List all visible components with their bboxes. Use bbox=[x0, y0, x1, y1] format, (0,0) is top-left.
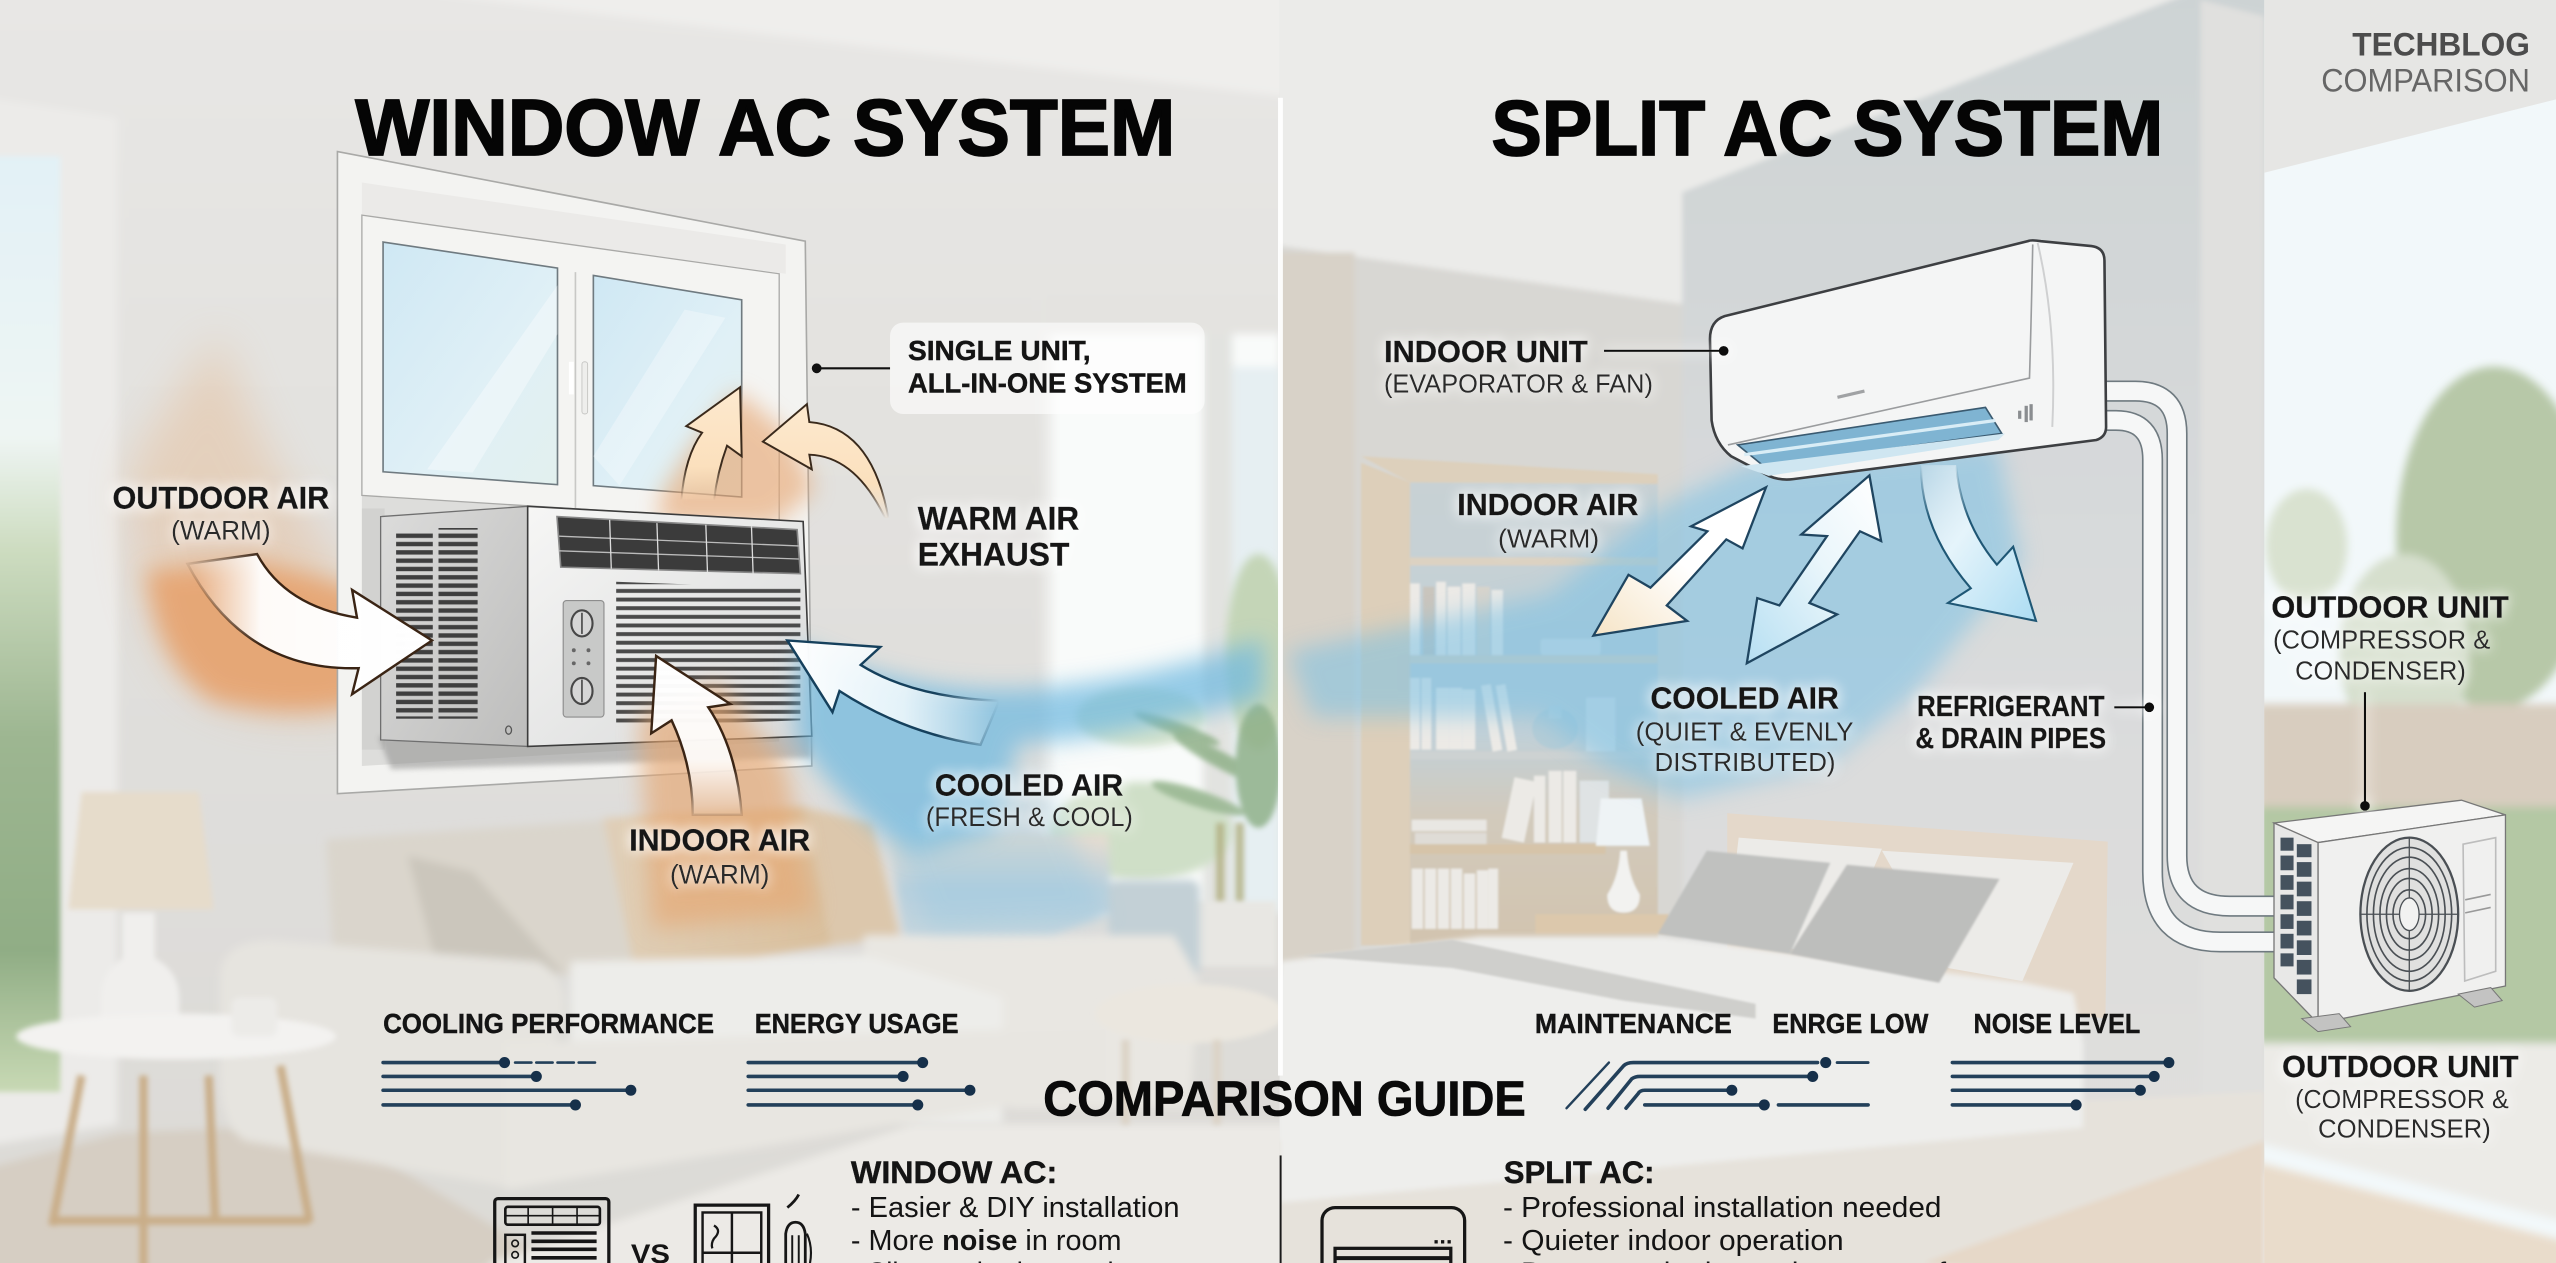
panel: split AC system bbox=[1271, 0, 2556, 1263]
divider: centre white line bbox=[1278, 98, 1283, 1076]
arrow: cooled air bbox=[787, 640, 999, 745]
icon: window AC unit bbox=[495, 1199, 609, 1263]
metric: energy usage bbox=[748, 1008, 975, 1110]
label: outdoor unit lower: OUTDOOR UNIT bbox=[2282, 1049, 2519, 1084]
metric: noise level bbox=[1952, 1008, 2174, 1110]
arrow: outdoor air bbox=[187, 554, 432, 694]
label: indoor air: INDOOR AIR bbox=[629, 823, 810, 858]
gray pillows bbox=[1658, 851, 1999, 983]
books bbox=[1410, 582, 1615, 929]
label: outdoor unit lower bbox=[2282, 1049, 2519, 1144]
fan bbox=[2360, 838, 2458, 991]
metric: maintenance: MAINTENANCE bbox=[1535, 1008, 1732, 1039]
label: indoor air: (WARM) bbox=[1498, 524, 1599, 554]
brand: techblog comparison: TECHBLOG bbox=[2352, 25, 2530, 62]
divider: bottom vertical line bbox=[1280, 1155, 1282, 1263]
label: indoor air: (WARM) bbox=[670, 859, 769, 889]
label: refrigerant and drain pipes: REFRIGERANT bbox=[1917, 691, 2105, 723]
icon: window with airflow bbox=[695, 1195, 811, 1263]
label: cooled air: COOLED AIR bbox=[935, 767, 1123, 802]
glow: split cooled air bbox=[1288, 443, 2021, 799]
glow: warm outdoor air core bbox=[147, 562, 399, 711]
outdoor scene bbox=[2250, 0, 2556, 1263]
label: cooled air: (FRESH & COOL) bbox=[926, 802, 1133, 832]
side louvers bbox=[396, 528, 478, 719]
list: window AC: WINDOW AC: bbox=[851, 1154, 1057, 1190]
label: outdoor air bbox=[112, 479, 329, 545]
list: split AC: - Professional installation needed bbox=[1503, 1192, 1941, 1224]
label: cooled air: DISTRIBUTED) bbox=[1655, 747, 1835, 777]
label: indoor air bbox=[629, 823, 810, 889]
background: bedroom bbox=[1271, 0, 2556, 1263]
arrow: warm exhaust side bbox=[763, 404, 888, 518]
label: cooled air bbox=[926, 767, 1133, 832]
glow: warm exhaust bbox=[660, 391, 815, 525]
label: cooled air bbox=[1636, 680, 1853, 777]
brand: techblog comparison: COMPARISON bbox=[2321, 61, 2530, 98]
labels: window AC airflows bbox=[112, 479, 1133, 889]
window panes bbox=[383, 242, 742, 497]
labels: split AC parts bbox=[1384, 334, 2519, 1144]
label: indoor unit: (EVAPORATOR & FAN) bbox=[1384, 369, 1653, 399]
label: indoor unit: INDOOR UNIT bbox=[1384, 334, 1588, 369]
label: warm air exhaust: EXHAUST bbox=[918, 536, 1069, 572]
panel: window AC system bbox=[0, 0, 1320, 1263]
air vent bbox=[1738, 407, 2002, 466]
arrow: indoor air bbox=[651, 656, 742, 815]
sofa bbox=[220, 807, 1200, 1190]
outdoor unit bbox=[2274, 800, 2505, 1032]
metric: energy usage: ENERGY USAGE bbox=[755, 1008, 958, 1039]
window bbox=[337, 152, 812, 794]
arrow: warm exhaust up bbox=[681, 387, 742, 500]
title: window AC: WINDOW AC SYSTEM bbox=[355, 83, 1175, 172]
top vent bbox=[557, 517, 800, 574]
label: outdoor unit upper: (COMPRESSOR & bbox=[2273, 625, 2490, 655]
list: split AC: SPLIT AC: bbox=[1504, 1154, 1655, 1190]
metric: cooling performance bbox=[383, 1008, 714, 1110]
glow: indoor warm air bbox=[639, 681, 815, 929]
arrow: cooled air double bbox=[1747, 475, 1881, 663]
arrow: indoor air double bbox=[1593, 487, 1766, 636]
control panel bbox=[563, 601, 604, 717]
heading: comparison guide: COMPARISON GUIDE bbox=[1043, 1073, 1526, 1127]
front grill bbox=[616, 582, 800, 727]
label: outdoor unit lower: CONDENSER) bbox=[2318, 1114, 2491, 1144]
label: indoor air bbox=[1457, 487, 1638, 554]
metric: cooling performance: COOLING PERFORMANCE bbox=[383, 1008, 714, 1039]
bed bbox=[1280, 813, 2108, 1203]
label: outdoor unit upper bbox=[2271, 590, 2509, 811]
title: split AC: SPLIT AC SYSTEM bbox=[1492, 84, 2163, 172]
callout: single unit bbox=[812, 323, 1205, 414]
label: warm air exhaust bbox=[918, 500, 1079, 572]
label: indoor unit bbox=[1384, 334, 1729, 399]
table lamp bbox=[1596, 799, 1650, 913]
right window view bbox=[1050, 554, 1291, 880]
metric: noise level: NOISE LEVEL bbox=[1974, 1008, 2140, 1039]
label: outdoor unit lower: (COMPRESSOR & bbox=[2295, 1084, 2509, 1114]
arrow: cooled air down bbox=[1921, 465, 2036, 621]
label: refrigerant and drain pipes: & DRAIN PIPES bbox=[1915, 723, 2106, 755]
glow: cooled air bbox=[795, 639, 1263, 856]
label: refrigerant and drain pipes bbox=[1915, 691, 2154, 755]
plant bbox=[1132, 704, 1281, 904]
list: window AC: - Easier & DIY installation bbox=[851, 1192, 1180, 1224]
brand: techblog comparison bbox=[2321, 25, 2530, 98]
bookshelf bbox=[1361, 456, 1669, 945]
label: cooled air: (QUIET & EVENLY bbox=[1636, 717, 1853, 747]
label: outdoor air: OUTDOOR AIR bbox=[112, 479, 329, 515]
glow: cooled air tail bbox=[888, 766, 1108, 929]
side table and lamp bbox=[16, 792, 1285, 1263]
metric: maintenance bbox=[1535, 1008, 1868, 1110]
label: outdoor air: (WARM) bbox=[171, 515, 271, 545]
icon: split AC unit bbox=[1322, 1208, 1465, 1263]
background: blurred living room bbox=[0, 0, 1320, 1263]
list: split AC bbox=[1503, 1154, 1981, 1263]
window AC unit bbox=[381, 506, 812, 746]
label: outdoor unit upper: OUTDOOR UNIT bbox=[2271, 590, 2509, 625]
list: window AC: - More noise in room bbox=[851, 1225, 1122, 1257]
glow: warm outdoor air bbox=[116, 342, 336, 732]
label: outdoor unit upper: CONDENSER) bbox=[2295, 656, 2466, 686]
label: warm air exhaust: WARM AIR bbox=[918, 500, 1079, 537]
callout: single unit: SINGLE UNIT, bbox=[908, 335, 1091, 366]
side grille bbox=[2281, 838, 2311, 994]
metric: energy low: ENRGE LOW bbox=[1772, 1008, 1929, 1039]
label: cooled air: COOLED AIR bbox=[1650, 680, 1839, 715]
refrigerant and drain pipes bbox=[2095, 391, 2276, 942]
list: window AC bbox=[851, 1154, 1180, 1263]
plant pot bbox=[1200, 898, 1275, 964]
label: indoor air: INDOOR AIR bbox=[1457, 487, 1638, 522]
list: split AC: - Quieter indoor operation bbox=[1503, 1225, 1844, 1257]
callout: single unit: ALL-IN-ONE SYSTEM bbox=[908, 368, 1187, 399]
left window view bbox=[0, 156, 60, 1092]
indoor unit bbox=[1710, 240, 2106, 480]
